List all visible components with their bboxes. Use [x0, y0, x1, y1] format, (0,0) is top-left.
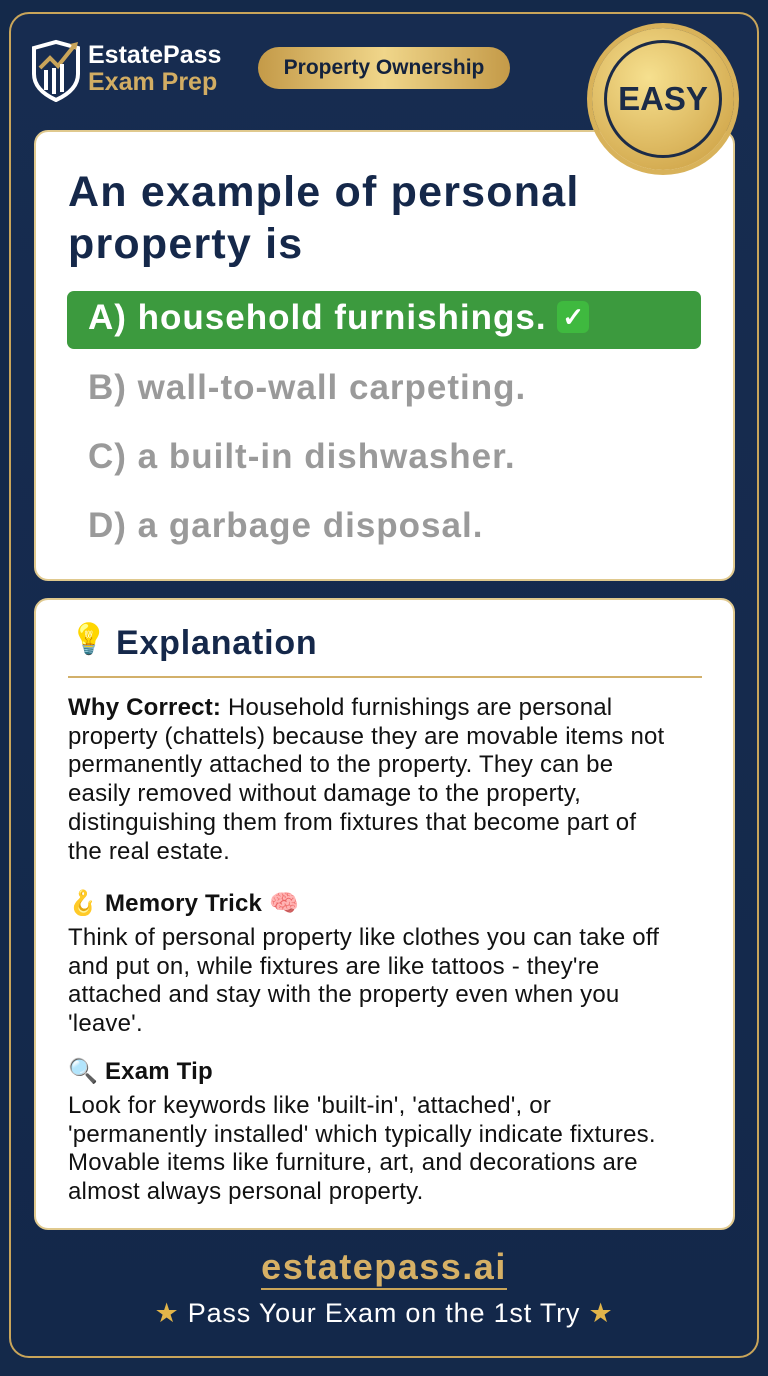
category pill: Property Ownership [284, 56, 484, 79]
logo [32, 40, 221, 102]
exam tip text: almost always personal property. [68, 1178, 423, 1205]
memory trick text: 'leave'. [68, 1010, 143, 1037]
panel: question [34, 130, 735, 581]
icon: lightbulb: 💡 [70, 623, 107, 656]
exam tip text: Look for keywords like 'built-in', 'attached', or [68, 1092, 551, 1119]
badge: EASY: EASY [618, 80, 708, 117]
question heading: An example of personal [68, 168, 579, 216]
option B: B) wall-to-wall carpeting. [88, 368, 526, 407]
why correct text: permanently attached to the property. They can be [68, 751, 613, 778]
memory trick text [68, 924, 659, 1037]
exam tip text: 'permanently installed' which typically indicate fixtures. [68, 1121, 656, 1148]
why correct text: easily removed without damage to the property, [68, 780, 581, 807]
brand text [88, 41, 221, 96]
option D: D) a garbage disposal. [88, 506, 483, 545]
exam tip text [68, 1092, 656, 1205]
exam tip heading: 🔍 Exam Tip [68, 1058, 213, 1085]
explanation heading: Explanation [116, 624, 318, 662]
footer url: estatepass.ai [261, 1246, 507, 1287]
text: A) household furnishings. [88, 298, 547, 337]
text: ✓ [562, 302, 584, 332]
footer tagline: ★ Pass Your Exam on the 1st Try ★ [154, 1298, 614, 1328]
question heading: property is [68, 220, 303, 268]
memory trick text: Think of personal property like clothes you can take off [68, 924, 659, 951]
question heading [68, 168, 579, 268]
exam tip text: Movable items like furniture, art, and decorations are [68, 1149, 638, 1176]
brand text: Exam Prep [88, 68, 217, 96]
why correct text: property (chattels) because they are movable items not [68, 723, 664, 750]
panel: explanation [34, 598, 735, 1230]
why correct text: Why Correct: Household furnishings are personal [68, 694, 612, 721]
memory trick heading: 🪝 Memory Trick 🧠 [68, 890, 299, 917]
why correct text: distinguishing them from fixtures that become part of [68, 809, 636, 836]
why correct text [68, 694, 664, 865]
option C: C) a built-in dishwasher. [88, 437, 516, 476]
option A correct [67, 291, 701, 349]
brand text: EstatePass [88, 41, 221, 69]
memory trick text: and put on, while fixtures are like tattoos - they're [68, 953, 599, 980]
category pill [258, 47, 510, 89]
badge: EASY [592, 28, 734, 170]
memory trick text: attached and stay with the property even when you [68, 981, 619, 1008]
icon: shield logo [32, 40, 80, 102]
why correct text: the real estate. [68, 838, 230, 865]
